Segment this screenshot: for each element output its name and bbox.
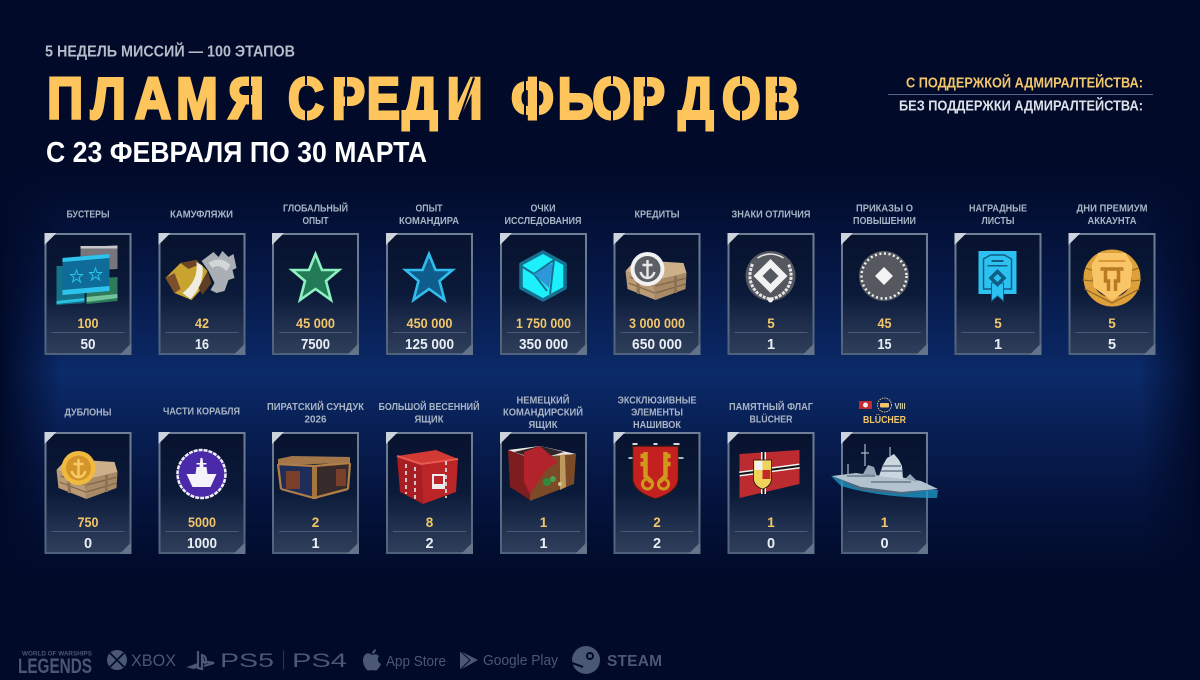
card: doubloons: ДУБЛОНЫ	[64, 408, 112, 418]
card: promotion orders: ПРИКАЗЫ О	[856, 204, 913, 214]
card: research points: ИССЛЕДОВАНИЯ	[504, 216, 582, 227]
card: promotion orders: 15	[878, 337, 892, 353]
icon: blue certificate	[978, 251, 1016, 301]
icon: gold premium emblem	[1082, 253, 1142, 303]
title: ПЛАМЯ	[47, 66, 264, 131]
card: camouflages: КАМУФЛЯЖИ	[170, 210, 233, 220]
card: camouflages	[158, 210, 246, 355]
logo: World of Warships Legends: LEGENDS	[18, 655, 92, 678]
legend: admiralty support: БЕЗ ПОДДЕРЖКИ АДМИРАЛТЕЙСТВА:	[899, 96, 1143, 114]
card: promotion orders: ПОВЫШЕНИИ	[853, 216, 916, 227]
card: global experience: 45 000	[296, 316, 335, 331]
title	[47, 66, 800, 131]
card: doubloons: 0	[84, 536, 92, 552]
title: СРЕДИ	[288, 66, 482, 131]
card: german commander crate: 1	[539, 536, 548, 552]
logo: World of Warships Legends: WORLD OF WARSHIPS	[22, 652, 92, 658]
card: commander experience: ОПЫТ	[416, 204, 442, 214]
icon: camouflage shells	[166, 251, 236, 300]
card: large spring crate: 2	[425, 536, 434, 552]
card: credits: 3 000 000	[629, 316, 685, 331]
card: memorial flag Blücher	[728, 400, 814, 554]
card: german commander crate: ЯЩИК	[528, 420, 558, 431]
card: commander experience: 125 000	[405, 337, 454, 353]
card: boosters: БУСТЕРЫ	[66, 210, 110, 220]
card: memorial flag Blücher: ПАМЯТНЫЙ ФЛАГ	[729, 400, 813, 413]
icon: round order	[859, 251, 909, 301]
card: distinction signs: 1	[767, 337, 775, 353]
card: doubloons	[44, 408, 132, 554]
card: ship Blücher	[831, 398, 938, 554]
card: large spring crate	[378, 400, 480, 554]
card: german commander crate: 1	[540, 515, 548, 530]
logo: App Store	[363, 649, 446, 670]
card: research points: 1 750 000	[516, 316, 571, 331]
card: pirate chest 2026: ПИРАТСКИЙ СУНДУК	[267, 400, 365, 413]
card: credits	[614, 210, 700, 355]
card: global experience: ГЛОБАЛЬНЫЙ	[283, 202, 348, 214]
card: german commander crate: КОМАНДИРСКИЙ	[503, 406, 583, 418]
header text	[45, 42, 800, 169]
card: pirate chest 2026: 2	[312, 515, 319, 530]
card: pirate chest 2026: 1	[311, 536, 320, 552]
card: ship parts: ЧАСТИ КОРАБЛЯ	[163, 406, 240, 418]
card: reward sheets: 1	[994, 337, 1002, 353]
card: exclusive patch elements: ЭКСКЛЮЗИВНЫЕ	[618, 396, 697, 406]
logo: Google Play	[460, 651, 558, 670]
card: promotion orders: 45	[878, 316, 892, 331]
logo: PlayStation 5 and 4	[190, 650, 348, 672]
card: boosters: 100	[78, 316, 98, 331]
card: doubloons: 750	[78, 515, 98, 530]
icon: red shield with keys	[628, 444, 684, 499]
eyebrow: weeks and stages: 5 НЕДЕЛЬ МИССИЙ — 100 ЭТАПОВ	[45, 42, 295, 60]
card: boosters	[44, 210, 132, 355]
card: exclusive patch elements	[614, 396, 700, 554]
card: ship parts: 1000	[187, 536, 217, 552]
logo: PlayStation 5 and 4: PS5	[220, 651, 274, 672]
card: commander experience	[386, 204, 473, 355]
logo: Xbox	[107, 650, 176, 670]
card: premium days	[1068, 204, 1156, 355]
card: boosters: 50	[80, 337, 96, 353]
ship	[831, 444, 938, 498]
card: reward sheets: НАГРАДНЫЕ	[969, 204, 1027, 214]
card: distinction signs: 5	[767, 316, 775, 331]
icon: credits crate	[626, 252, 686, 300]
card: premium days: 5	[1108, 337, 1116, 353]
icon: pirate chest	[278, 456, 350, 499]
card: memorial flag Blücher: 0	[767, 536, 775, 552]
card: distinction signs: ЗНАКИ ОТЛИЧИЯ	[732, 210, 810, 220]
logo: Xbox: XBOX	[131, 651, 176, 670]
logo: Steam	[572, 646, 662, 674]
legend: admiralty support	[888, 74, 1153, 114]
icon: commander crate	[508, 446, 576, 501]
icon: German flag	[740, 450, 800, 498]
card: commander experience: КОМАНДИРА	[399, 216, 459, 227]
card: premium days: ДНИ ПРЕМИУМ	[1076, 204, 1148, 214]
card: large spring crate: 8	[426, 515, 434, 530]
card: distinction signs	[728, 210, 814, 355]
card: exclusive patch elements: НАШИВОК	[633, 420, 682, 431]
icon: ship part badge	[178, 450, 226, 498]
ship tier header: VIII	[894, 401, 906, 411]
card: ship Blücher: 0	[880, 536, 889, 552]
title: ФЬОРДОВ	[511, 66, 800, 131]
card: credits: КРЕДИТЫ	[634, 210, 680, 220]
date range: С 23 ФЕВРАЛЯ ПО 30 МАРТА	[46, 137, 427, 169]
card: reward sheets	[954, 204, 1042, 355]
logo: Google Play: Google Play	[483, 652, 558, 669]
card: pirate chest 2026: 2026	[304, 414, 327, 426]
ship tier header	[859, 398, 906, 412]
card: pirate chest 2026	[267, 400, 365, 554]
card: german commander crate	[500, 394, 587, 554]
icon: red crate	[397, 450, 458, 504]
logo: PlayStation 5 and 4: PS4	[292, 651, 348, 672]
logo: App Store: App Store	[386, 653, 446, 670]
card: memorial flag Blücher: 1	[767, 515, 775, 530]
card: large spring crate: БОЛЬШОЙ ВЕСЕННИЙ	[378, 400, 480, 413]
card: ship parts	[158, 406, 246, 554]
card: ship Blücher: BLÜCHER	[863, 413, 907, 426]
card: reward sheets: 5	[994, 316, 1002, 331]
icon: doubloon crate	[56, 451, 118, 499]
card: global experience	[272, 202, 359, 355]
card: exclusive patch elements: 2	[653, 536, 661, 552]
card: german commander crate: НЕМЕЦКИЙ	[516, 394, 570, 406]
legend: admiralty support: С ПОДДЕРЖКОЙ АДМИРАЛТЕЙСТВА:	[906, 74, 1143, 92]
footer: platform logos	[18, 646, 662, 678]
card: global experience: ОПЫТ	[302, 216, 328, 227]
card: global experience: 7500	[301, 337, 330, 353]
card: large spring crate: ЯЩИК	[414, 414, 444, 426]
card: camouflages: 42	[195, 316, 209, 331]
card: promotion orders	[841, 204, 928, 355]
card: exclusive patch elements: 2	[653, 515, 661, 530]
card: research points: 350 000	[519, 337, 568, 353]
icon: research hexagon	[521, 252, 565, 300]
logo: World of Warships Legends	[18, 652, 92, 678]
card: exclusive patch elements: ЭЛЕМЕНТЫ	[631, 408, 683, 418]
card: research points: ОЧКИ	[530, 204, 556, 214]
icon: emblem with wreath	[746, 251, 796, 302]
card: premium days: АККАУНТА	[1088, 216, 1136, 227]
card: research points	[500, 204, 587, 355]
card: reward sheets: ЛИСТЫ	[982, 216, 1015, 227]
logo: Steam: STEAM	[607, 653, 662, 670]
card: commander experience: 450 000	[406, 316, 452, 331]
card: camouflages: 16	[195, 337, 209, 353]
card: memorial flag Blücher: BLÜCHER	[750, 412, 793, 426]
icon: green star	[292, 254, 339, 300]
card: premium days: 5	[1108, 316, 1116, 331]
card: ship Blücher: 1	[881, 515, 889, 530]
icon: blue star	[406, 254, 452, 300]
card: credits: 650 000	[632, 337, 682, 353]
card: ship parts: 5000	[188, 515, 216, 530]
icon: signal flags	[56, 245, 118, 305]
